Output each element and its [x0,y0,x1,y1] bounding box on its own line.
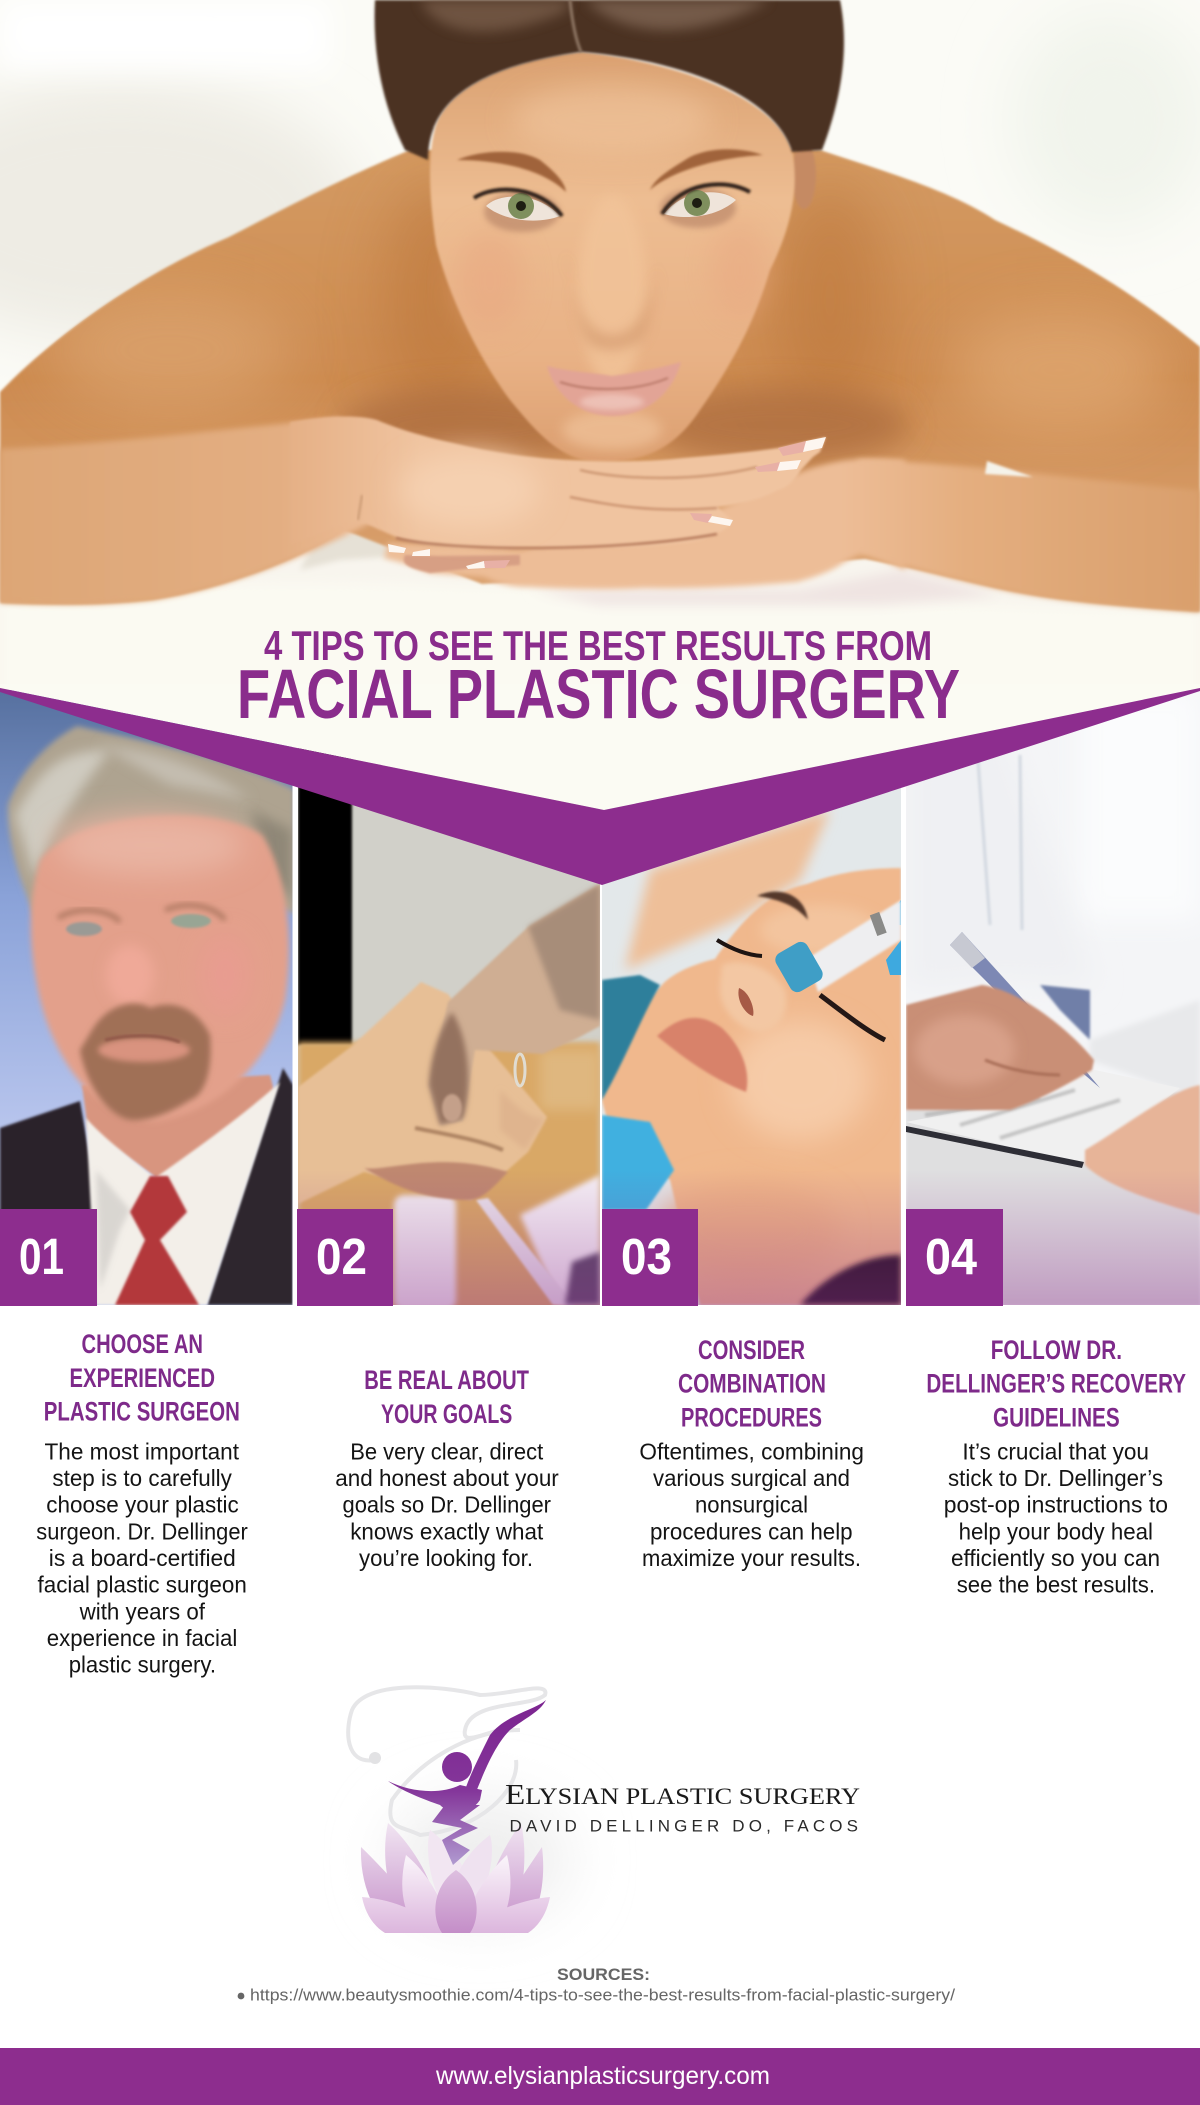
number badge 01 [0,1209,97,1306]
tip 2 heading: YOUR GOALS [381,1399,512,1429]
tip 4 body: post-op instructions to [944,1492,1168,1518]
number badge 04: 04 [925,1228,978,1285]
tip 1 heading: PLASTIC SURGEON [44,1396,240,1426]
purple chevron band [0,688,1200,885]
tip 1 heading: EXPERIENCED [70,1363,215,1393]
pen [950,932,1100,1088]
tip 1 body: experience in facial [47,1625,237,1651]
face [31,816,289,1122]
number badge 01: 01 [19,1228,64,1285]
face [430,52,795,462]
panel: photo 4, doctor writing [906,690,1200,1306]
soft purple fade [906,1170,1200,1306]
right hand [429,884,600,1125]
tip 4 heading: GUIDELINES [993,1403,1120,1433]
title: 4 TIPS TO SEE THE BEST RESULTS FROM [264,622,932,669]
tip 2 body: goals so Dr. Dellinger [342,1492,551,1518]
tip 2 heading: BE REAL ABOUT [364,1365,529,1395]
sources [238,1965,955,2005]
hair at bottom [800,1255,901,1305]
tip 3 body: various surgical and [653,1465,850,1491]
tip 4 body: stick to Dr. Dellinger’s [948,1465,1163,1491]
tip 1 body: with years of [79,1598,206,1624]
sources: https://www.beautysmoothie.com/4-tips-to-see-the-best-results-from-facial-plastic-surgery/ [250,1986,955,2005]
moustache and goatee [80,1003,211,1120]
sheet gap right of chin [985,461,1033,477]
eyes [474,184,750,232]
sources: SOURCES: [557,1965,650,1984]
hands [290,416,905,589]
tip 4 body [944,1438,1168,1598]
tie [115,1176,199,1305]
logo: Elysian Plastic Surgery [348,1687,860,1933]
number badge 03: 03 [621,1228,672,1285]
logo wordmark [505,1779,860,1836]
tip 2 body [335,1438,559,1571]
ear [794,149,815,208]
lower hand [384,459,905,589]
number badge 03 [602,1209,698,1306]
logo wordmark: DAVID DELLINGER DO, FACOS [510,1817,858,1836]
tip 3 heading: COMBINATION [678,1369,826,1399]
face [602,868,901,1305]
panel: photo 3, facial treatment [602,788,901,1305]
lips [657,1018,747,1092]
ring [515,1054,525,1086]
tip 1 body [36,1438,248,1678]
footer bar [0,2048,1200,2105]
tip 1 [36,1329,248,1678]
panel: photo 1, surgeon portrait [0,690,295,1305]
tip 2 body: you’re looking for. [359,1545,533,1571]
upper hand [290,416,826,549]
closed eyes and brow [717,940,762,956]
shoulders and chest [0,150,1200,612]
tip 4 [926,1335,1186,1598]
tip 1 body: surgeon. Dr. Dellinger [36,1518,248,1544]
tip 3 body: nonsurgical [695,1492,808,1518]
gloves [602,975,660,1100]
neck [82,1075,275,1180]
logo wordmark: ELYSIAN PLASTIC SURGERY [505,1779,860,1811]
document [906,1070,1180,1164]
tip 4 body: help your body heal [959,1518,1153,1544]
tip 1 body: is a board-certified [49,1545,236,1571]
lotus flower [361,1823,550,1933]
soft purple fade [298,1185,600,1305]
tip 3 heading: PROCEDURES [681,1403,822,1433]
white objects [394,1195,456,1310]
tip 4 body: see the best results. [957,1572,1155,1598]
tip 1 body: The most important [44,1438,240,1464]
tip 4 body: efficiently so you can [951,1545,1160,1571]
client hand [1085,1085,1200,1215]
tip 2 heading [364,1365,529,1429]
shirt [86,1082,280,1305]
hair [8,726,295,930]
tip 4 body: It’s crucial that you [962,1438,1149,1464]
number badge 02: 02 [316,1228,367,1285]
tip 3 heading [678,1335,826,1433]
writing hand [906,985,1094,1110]
fingers under the grip [364,1162,508,1200]
left forearm [0,418,372,605]
tip 1 body: plastic surgery. [69,1652,216,1678]
hair [375,0,844,160]
logo soft backdrop [390,1800,570,1920]
tip 1 body: choose your plastic [46,1492,239,1518]
tip 3 body: maximize your results. [642,1545,861,1571]
right forearm [858,460,1200,612]
eyes [66,922,102,936]
tip 2 [335,1365,559,1571]
microneedling device [808,900,901,992]
nose [720,962,786,1032]
title: FACIAL PLASTIC SURGERY [237,655,960,733]
tip 2 body: knows exactly what [350,1518,544,1544]
tip 1 heading: CHOOSE AN [82,1329,203,1359]
number badge 04 [906,1209,1003,1306]
tip 4 heading [926,1335,1186,1433]
lips [547,362,681,416]
panel: photo 2, handshake [298,748,600,1305]
hero photo: woman resting chin on hands [0,0,1200,710]
nails [388,437,826,569]
tip 1 body: step is to carefully [52,1465,232,1491]
tip 3 body: procedures can help [650,1518,853,1544]
tip 2 body: and honest about your [335,1465,559,1491]
number badge 02 [297,1209,393,1306]
footer bar: www.elysianplasticsurgery.com [435,2062,770,2090]
tip 1 heading [44,1329,240,1426]
title [237,622,960,733]
tip 3 heading: CONSIDER [698,1335,805,1365]
dancer figure [388,1700,546,1865]
jacket [0,1101,100,1305]
eyebrows [457,152,566,192]
ghost script E [348,1687,545,1835]
tip 3 [639,1335,864,1571]
cream chevron centre [0,684,1200,810]
soft purple fade [602,1186,901,1305]
tip 3 body [639,1438,864,1571]
tip 3 body: Oftentimes, combining [639,1438,864,1464]
tip 2 body: Be very clear, direct [350,1438,544,1464]
left hand [298,982,547,1204]
white table [906,1090,1200,1305]
tip 1 body: facial plastic surgeon [38,1572,247,1598]
sleeve [1040,985,1090,1040]
tip 4 heading: FOLLOW DR. [991,1335,1122,1365]
